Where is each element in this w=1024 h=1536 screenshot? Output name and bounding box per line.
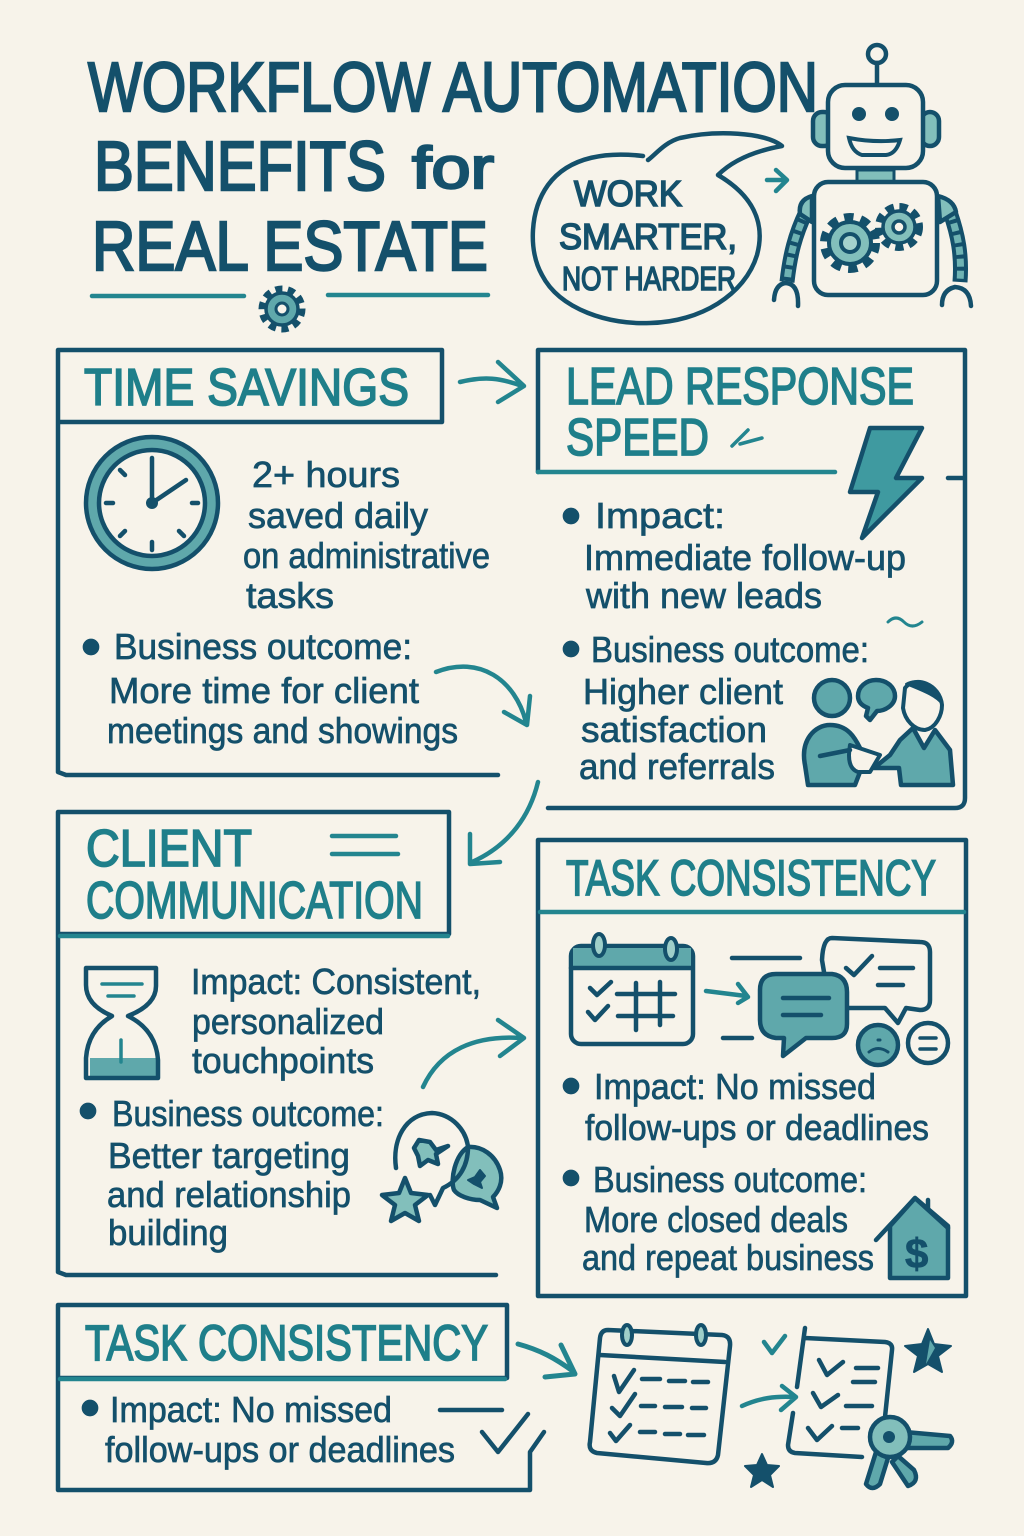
heading: lead response speed: SPEED bbox=[566, 409, 709, 467]
text: impact: follow-ups or deadlines bbox=[105, 1429, 455, 1470]
heading: client communication: COMMUNICATION bbox=[86, 872, 423, 930]
text: business outcome: and relationship bbox=[107, 1174, 351, 1215]
text: impact bbox=[563, 1066, 929, 1148]
title bbox=[88, 48, 818, 285]
text: business outcome bbox=[83, 626, 458, 751]
arrow: time savings to lead response bbox=[460, 362, 524, 402]
text: hours saved: 2+ hours bbox=[252, 454, 400, 495]
text: impact: personalized bbox=[192, 1001, 384, 1042]
icon: check mark bbox=[440, 1410, 528, 1452]
text: business outcome: Better targeting bbox=[108, 1135, 350, 1176]
panel: task consistency right bbox=[538, 840, 966, 1296]
icon: stars bbox=[745, 1329, 951, 1487]
text: business outcome: Business outcome: bbox=[112, 1093, 384, 1134]
text: business outcome: Business outcome: bbox=[591, 629, 869, 670]
arrow: calendar to checklist bbox=[742, 1386, 796, 1410]
text: impact: Immediate follow-up bbox=[584, 537, 906, 578]
heading: lead response speed: LEAD RESPONSE bbox=[566, 358, 914, 416]
arrow: to calendar bbox=[518, 1344, 575, 1377]
text: business outcome: satisfaction bbox=[581, 709, 767, 750]
title: WORKFLOW AUTOMATION bbox=[88, 48, 818, 126]
heading: client communication bbox=[86, 820, 423, 930]
arrow: client communication to task consistency bbox=[423, 1020, 524, 1087]
title: for bbox=[412, 136, 494, 201]
icon: hourglass bbox=[86, 968, 158, 1078]
text: impact: Impact: No missed bbox=[110, 1389, 392, 1430]
panel: task consistency bottom bbox=[58, 1305, 544, 1490]
text: business outcome: Business outcome: bbox=[593, 1159, 867, 1200]
panel: client communication bbox=[58, 812, 501, 1275]
speech bubble: NOT HARDER bbox=[562, 260, 736, 297]
arrow: lead response to client communication bbox=[470, 782, 538, 864]
speech bubble: SMARTER, bbox=[559, 216, 737, 257]
icon: robot bbox=[774, 45, 971, 306]
text: impact bbox=[563, 495, 906, 616]
text: business outcome: Business outcome: bbox=[114, 626, 412, 667]
text: business outcome: building bbox=[108, 1212, 228, 1253]
text: impact bbox=[191, 961, 481, 1081]
text: hours saved: tasks bbox=[246, 575, 334, 616]
text: business outcome: and referrals bbox=[579, 746, 775, 787]
text: business outcome bbox=[563, 1159, 874, 1278]
text: business outcome bbox=[563, 629, 869, 787]
icon: checklist with keys bbox=[788, 1328, 952, 1488]
text: business outcome: More time for client bbox=[109, 670, 419, 711]
icon: clock bbox=[86, 437, 218, 569]
icon: lightning bbox=[850, 428, 922, 538]
panel: lead response speed bbox=[538, 350, 965, 808]
title: REAL ESTATE bbox=[92, 207, 488, 285]
text: business outcome: and repeat business bbox=[582, 1237, 874, 1278]
text: hours saved bbox=[243, 454, 490, 616]
text: hours saved: saved daily bbox=[248, 495, 428, 536]
text: impact bbox=[82, 1389, 455, 1470]
icon: small arrow to robot bbox=[767, 170, 787, 191]
heading: lead response speed bbox=[566, 358, 914, 467]
icon: calendar bbox=[571, 934, 693, 1044]
text: impact: Impact: bbox=[595, 495, 725, 536]
speech bubble bbox=[533, 133, 782, 323]
heading: client communication: CLIENT bbox=[86, 820, 252, 878]
icon: chat bubbles and star bbox=[382, 1113, 501, 1221]
icon: house with dollar bbox=[876, 1198, 948, 1278]
icon: house with dollar: $ bbox=[905, 1230, 928, 1277]
heading: task consistency: TASK CONSISTENCY bbox=[85, 1315, 488, 1371]
text: business outcome: More closed deals bbox=[584, 1199, 848, 1240]
text: impact: with new leads bbox=[585, 575, 822, 616]
icon: chat bubbles bbox=[723, 938, 948, 1065]
title underline with gear bbox=[92, 289, 488, 329]
text: impact: follow-ups or deadlines bbox=[585, 1107, 929, 1148]
text: impact: Impact: Consistent, bbox=[191, 961, 481, 1002]
icon: small check bbox=[764, 1336, 785, 1353]
text: business outcome bbox=[80, 1093, 384, 1253]
text: impact: touchpoints bbox=[192, 1040, 374, 1081]
text: hours saved: on administrative bbox=[243, 535, 490, 576]
panel: time savings bbox=[58, 350, 498, 775]
heading: time savings: TIME SAVINGS bbox=[84, 359, 409, 417]
icon: handshake people bbox=[804, 680, 953, 785]
speech bubble: WORK bbox=[574, 173, 682, 214]
arrow: calendar to chat bbox=[706, 984, 748, 1003]
text: business outcome: Higher client bbox=[583, 671, 783, 712]
text: business outcome: meetings and showings bbox=[107, 710, 458, 751]
text: impact: Impact: No missed bbox=[594, 1066, 876, 1107]
title: BENEFITS bbox=[94, 127, 386, 205]
arrow: curved to lead response bbox=[436, 667, 530, 725]
icon: calendar checklist bbox=[590, 1325, 730, 1463]
